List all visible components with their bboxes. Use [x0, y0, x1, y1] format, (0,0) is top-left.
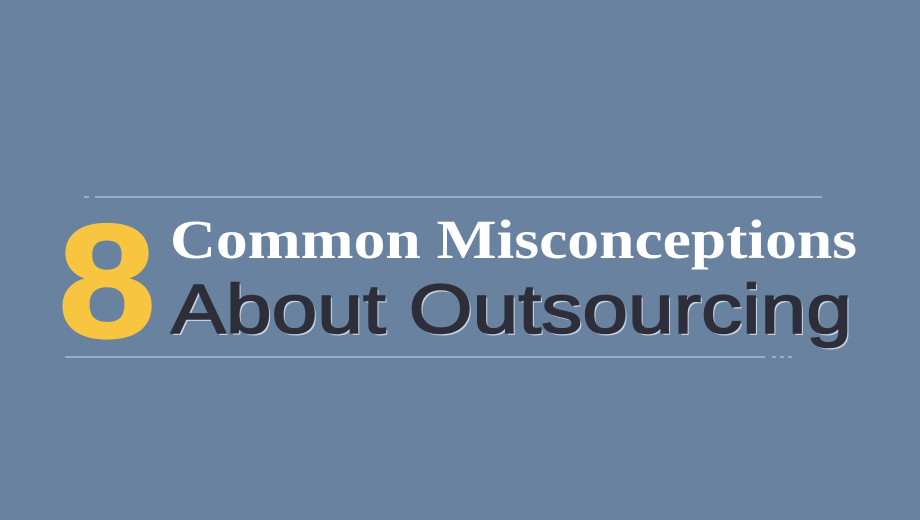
number 8: 8: [58, 191, 156, 372]
heading line 2: About Outsourcing: [173, 272, 854, 350]
heading line 1: Common Misconceptions: [170, 209, 857, 270]
heading line 2: About Outsourcing: [171, 270, 852, 348]
